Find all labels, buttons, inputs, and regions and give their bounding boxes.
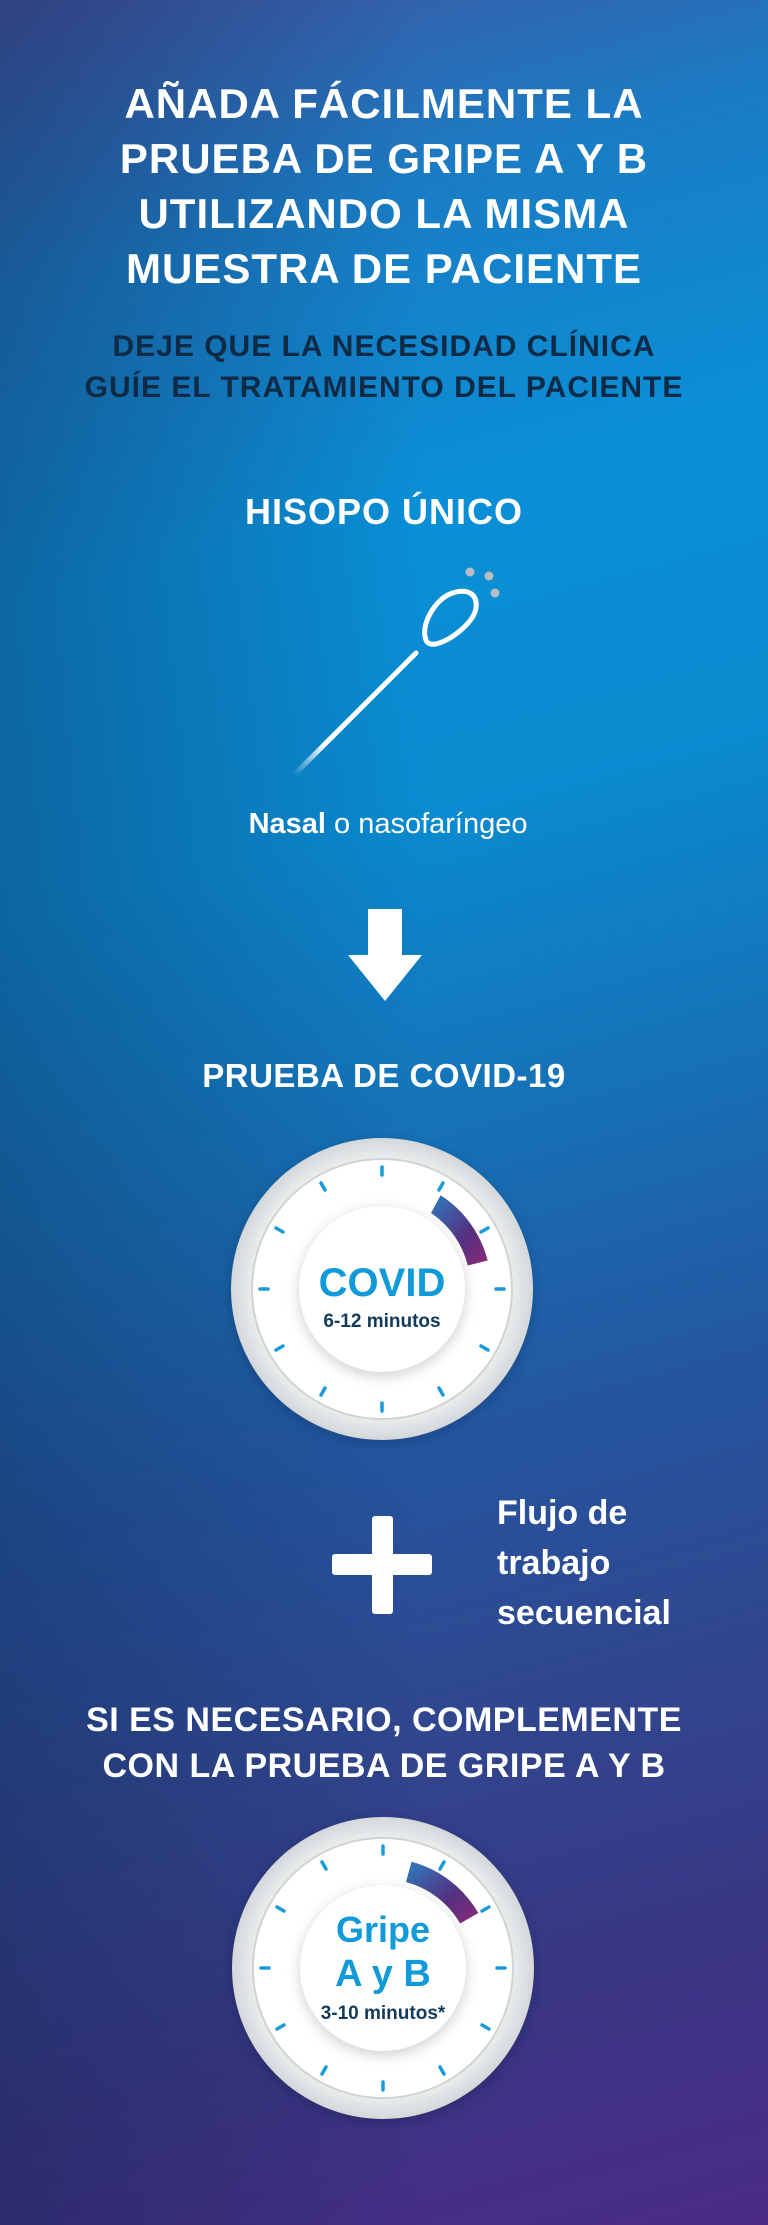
subtitle: GUÍE EL TRATAMIENTO DEL PACIENTE [85, 371, 683, 404]
title: PRUEBA DE GRIPE A Y B [120, 135, 648, 182]
label: sequential workflow: secuencial [497, 1594, 671, 1632]
clock: covid: COVID [319, 1261, 445, 1305]
clock: flu: 3-10 minutos* [321, 2003, 446, 2024]
title: UTILIZANDO LA MISMA [138, 190, 630, 237]
clock: flu [231, 1817, 536, 2124]
subtitle: DEJE QUE LA NECESIDAD CLÍNICA [113, 330, 655, 363]
subtitle [85, 330, 683, 404]
label: sequential workflow [497, 1494, 671, 1632]
label: sequential workflow: Flujo de [497, 1494, 627, 1532]
clock: covid: 6-12 minutos [323, 1311, 441, 1332]
heading: flu test: SI ES NECESARIO, COMPLEMENTE [86, 1701, 682, 1739]
title: AÑADA FÁCILMENTE LA [124, 80, 644, 127]
heading: single swab: HISOPO ÚNICO [245, 491, 523, 532]
heading: covid test: PRUEBA DE COVID-19 [202, 1057, 566, 1094]
arrow: down [348, 909, 422, 1001]
label: sequential workflow: trabajo [497, 1544, 610, 1582]
clock: flu: A y B [335, 1953, 431, 1995]
clock: covid [228, 1138, 536, 1446]
title [120, 80, 648, 292]
swab caption: Nasal o nasofaríngeo [249, 808, 528, 840]
title: MUESTRA DE PACIENTE [126, 245, 642, 292]
icon: swab [294, 568, 500, 776]
heading: flu test [86, 1701, 682, 1785]
heading: flu test: CON LA PRUEBA DE GRIPE A Y B [102, 1747, 666, 1785]
clock: flu: Gripe [336, 1909, 430, 1950]
icon: plus [332, 1516, 432, 1614]
